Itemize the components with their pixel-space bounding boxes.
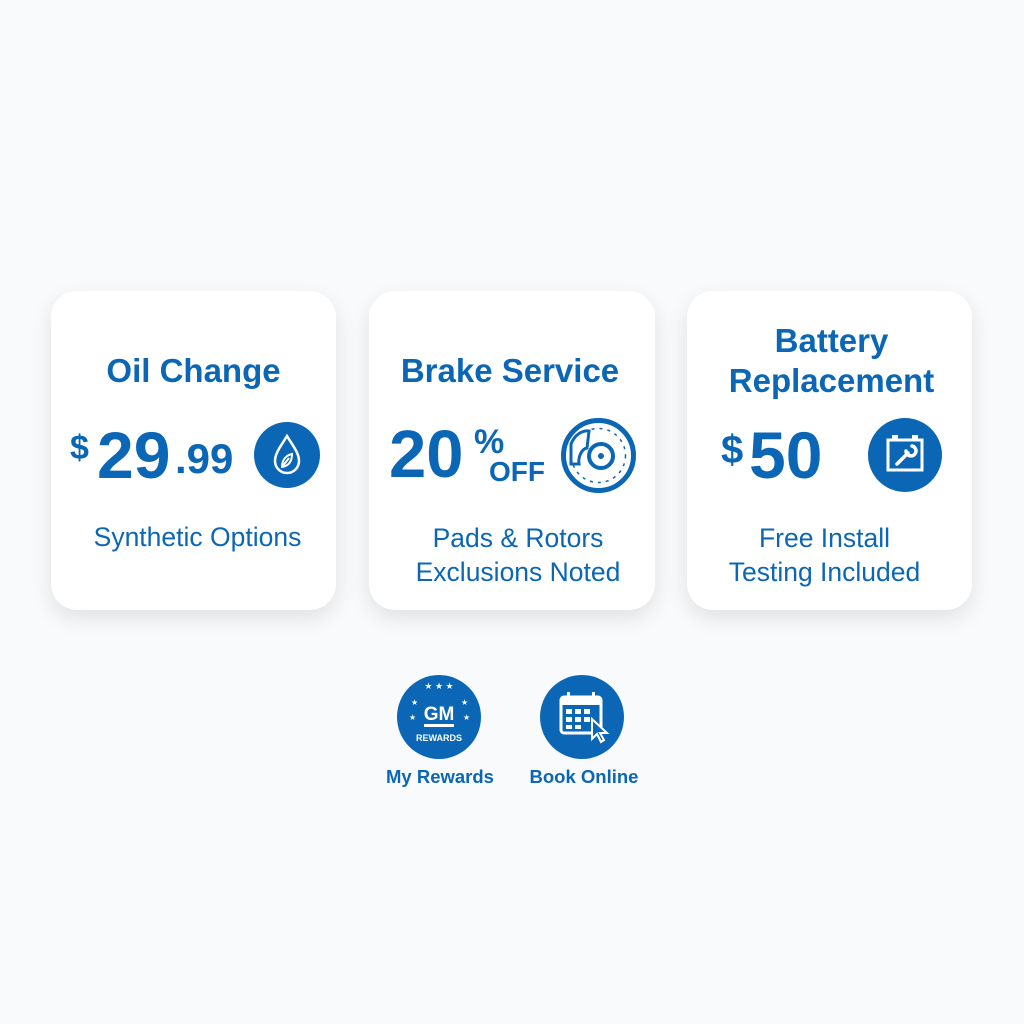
price: $29.99: $	[70, 429, 89, 467]
subtitle: Synthetic Options	[94, 522, 301, 552]
icon: GM rewards	[397, 675, 481, 759]
subtitle	[416, 523, 620, 587]
subtitle: Exclusions Noted	[416, 557, 620, 587]
title: brake service: Brake Service	[401, 352, 619, 389]
subtitle: Free Install	[759, 523, 890, 553]
title: battery replacement	[729, 322, 934, 399]
subtitle: Pads & Rotors	[433, 523, 603, 553]
price: $50: 50	[749, 418, 822, 492]
price: $29.99: .99	[175, 435, 233, 482]
icon: GM rewards: ★	[461, 698, 468, 707]
price: $29.99: 29	[97, 418, 170, 492]
icon: GM rewards: ★	[411, 698, 418, 707]
subtitle	[729, 523, 920, 587]
icon: GM rewards: ★ ★ ★	[424, 681, 454, 691]
icon: GM rewards: GM	[424, 704, 454, 725]
price: 20% off: OFF	[489, 456, 545, 487]
icon: GM rewards: ★	[409, 713, 416, 722]
icon: GM rewards: ★	[463, 713, 470, 722]
icon: book online calendar	[540, 675, 624, 759]
card: brake service	[369, 291, 655, 610]
price: 20% off: 20	[389, 417, 464, 492]
icon: GM rewards: REWARDS	[416, 733, 462, 743]
icon: oil drop	[254, 422, 320, 488]
label: book online: Book Online	[530, 766, 638, 787]
icon: brake disc	[561, 418, 636, 493]
label: my rewards: My Rewards	[386, 766, 494, 787]
title: oil change: Oil Change	[106, 352, 281, 389]
price: 20% off	[389, 417, 545, 492]
card: oil change	[51, 291, 336, 610]
title: battery replacement: Battery	[775, 322, 888, 359]
price: $50: $	[721, 428, 743, 472]
card: battery replacement	[687, 291, 972, 610]
subtitle: Testing Included	[729, 557, 920, 587]
icon: battery wrench	[868, 418, 942, 492]
price: $29.99	[70, 418, 233, 492]
price: 20% off: %	[474, 423, 504, 461]
title: battery replacement: Replacement	[729, 362, 934, 399]
